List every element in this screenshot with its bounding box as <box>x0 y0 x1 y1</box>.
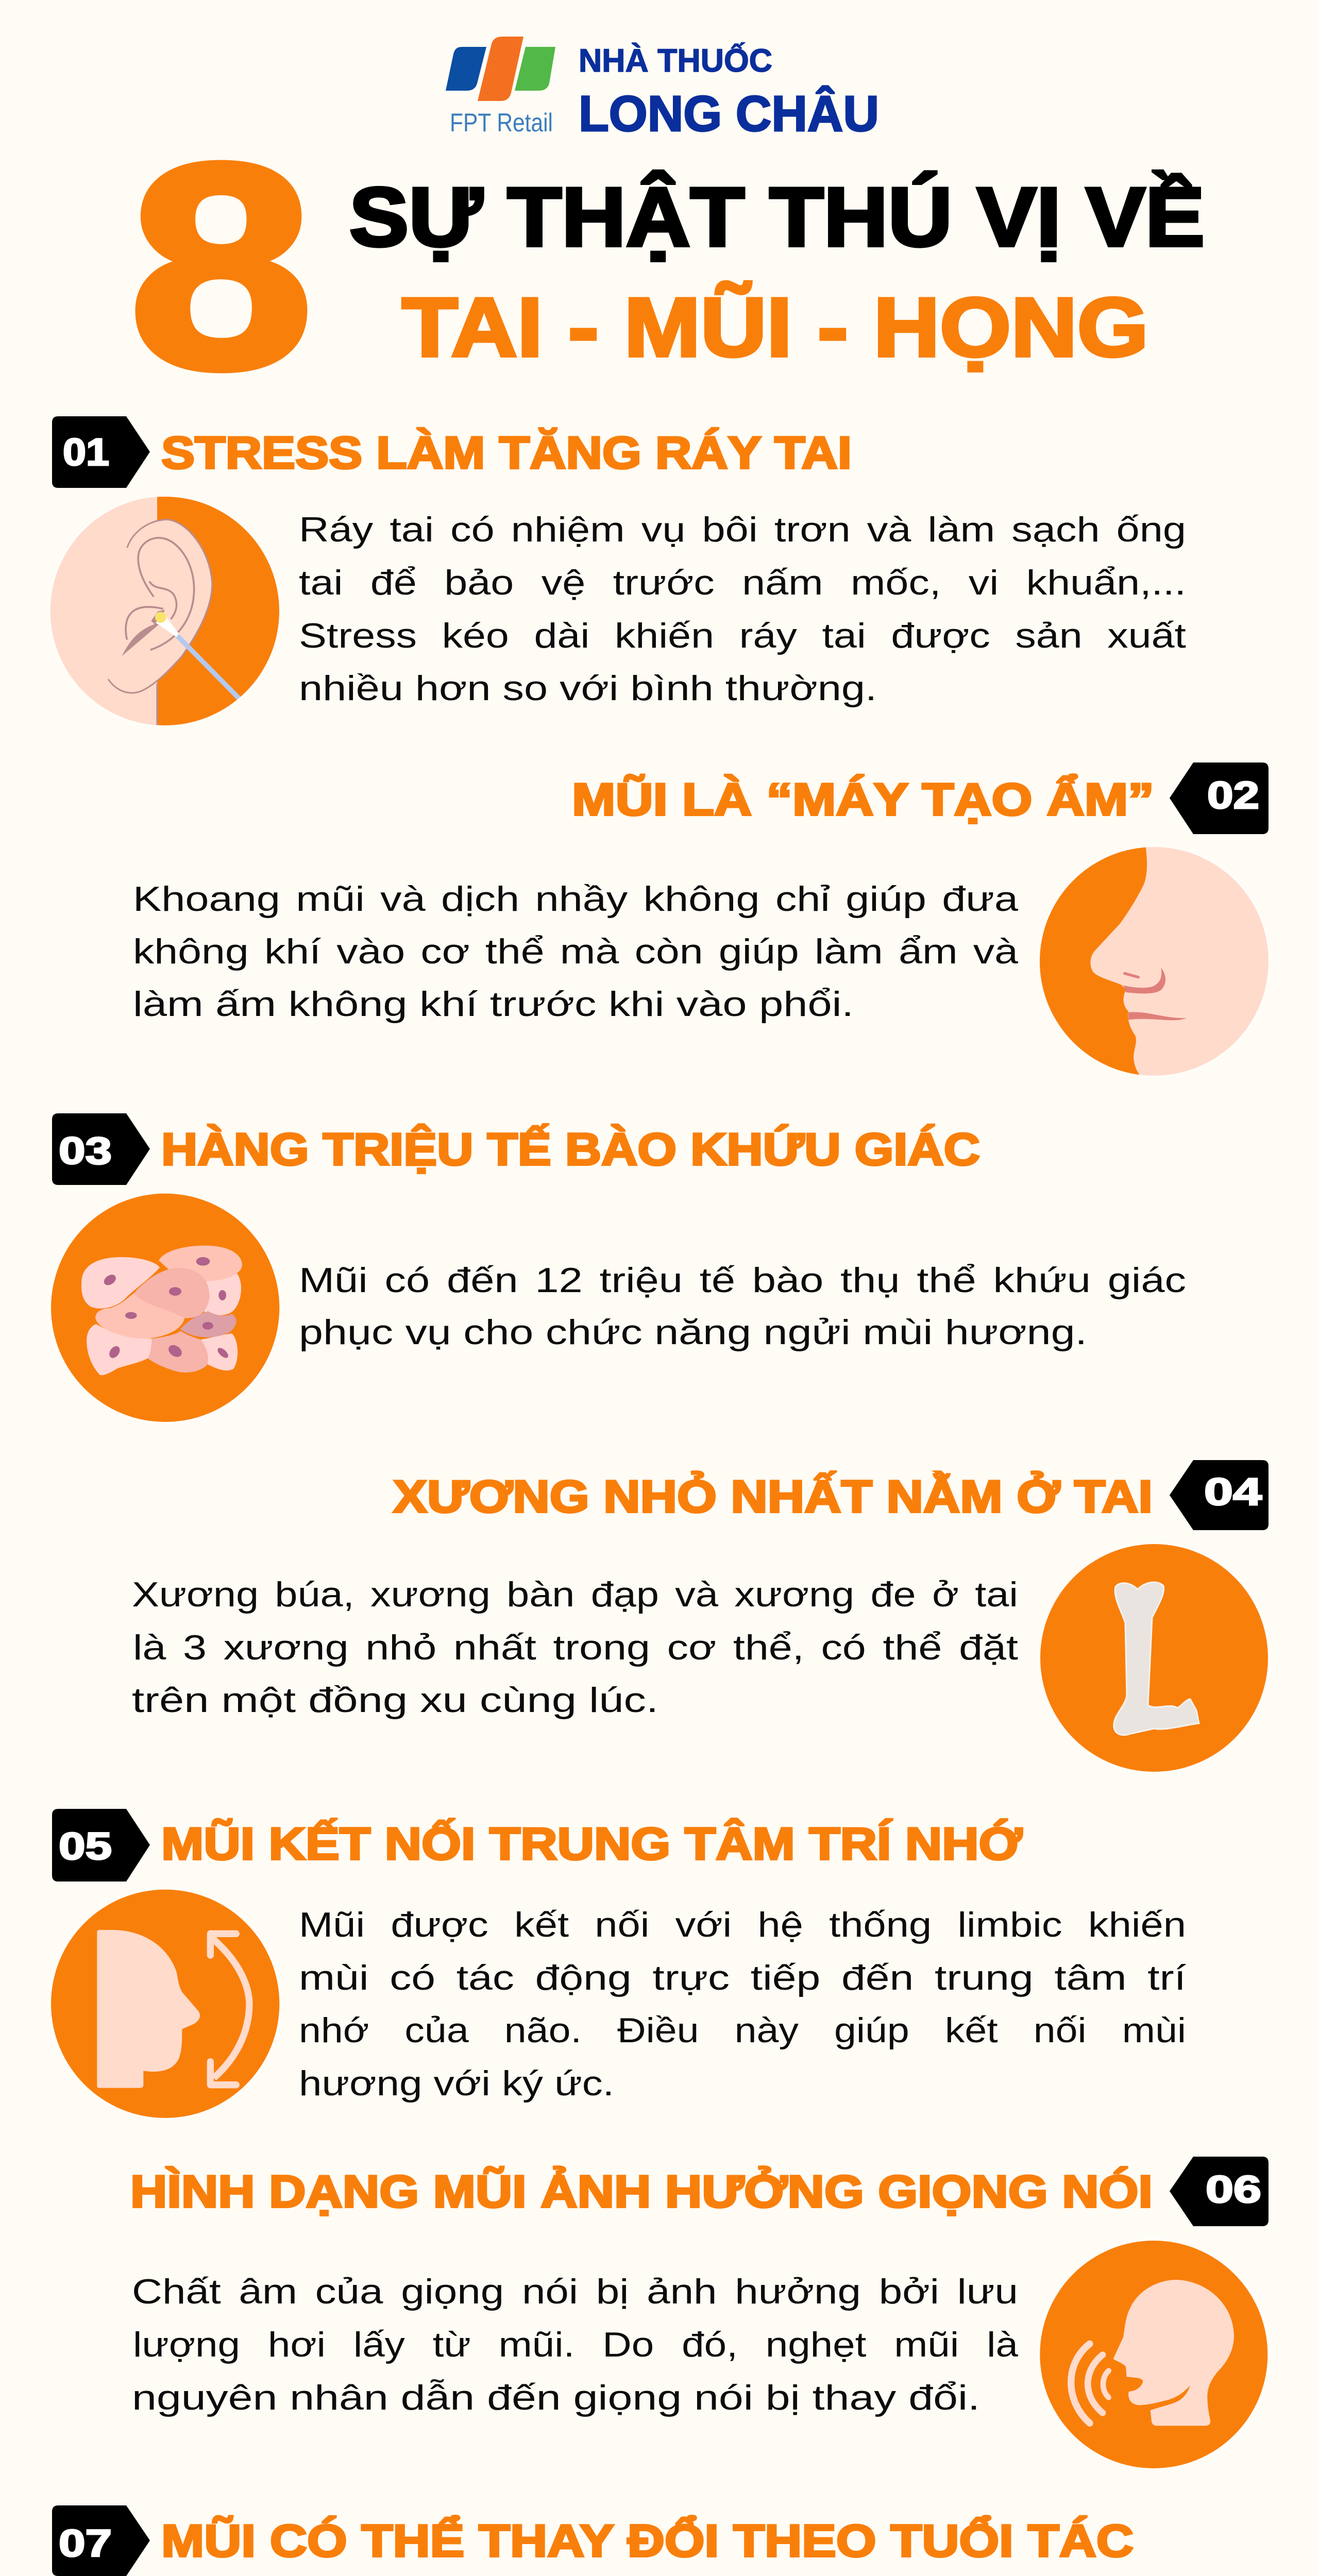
badge 07 <box>52 2505 150 2576</box>
text block 06: nguyên nhân dẫn đến giọng nói bị thay đổi. <box>132 2378 980 2417</box>
text block 01: nhiều hơn so với bình thường. <box>299 669 877 708</box>
badge 02 <box>1170 762 1269 834</box>
text block 05: hương với ký ức. <box>299 2064 614 2103</box>
text block 03 <box>299 1261 1186 1352</box>
icon: nose profile <box>1025 844 1271 1078</box>
text block 02: không khí vào cơ thể mà còn giúp làm ẩm và <box>133 932 1018 971</box>
badge 07: 07 <box>59 2522 112 2565</box>
text block 02 <box>133 879 1018 1024</box>
panel: fact 02 <box>133 762 1271 1078</box>
text block 01: Stress kéo dài khiến ráy tai được sản xuất <box>299 616 1186 655</box>
panel: fact 04 <box>132 1460 1271 1774</box>
text block 03: Mũi có đến 12 triệu tế bào thụ thể khứu giác <box>299 1261 1186 1300</box>
text block 01 <box>299 510 1186 708</box>
logo text: Nhà thuốc: NHÀ THUỐC <box>579 42 772 79</box>
text block 01: tai để bảo vệ trước nấm mốc, vi khuẩn,... <box>299 563 1186 602</box>
text block 06: Chất âm của giọng nói bị ảnh hưởng bởi lưu <box>132 2272 1018 2311</box>
badge 05: 05 <box>59 1825 112 1868</box>
badge 06: 06 <box>1206 2168 1261 2211</box>
badge 04 <box>1170 1460 1269 1530</box>
title <box>129 104 1205 429</box>
icon: FPT three-colour stripes <box>446 37 555 101</box>
badge 04: 04 <box>1204 1470 1262 1513</box>
heading 03: HÀNG TRIỆU TẾ BÀO KHỨU GIÁC <box>161 1124 980 1175</box>
icon: bone <box>1038 1541 1271 1774</box>
icon: head with arrow <box>48 1887 282 2121</box>
text block 05 <box>299 1905 1186 2103</box>
heading 07: MŨI CÓ THỂ THAY ĐỔI THEO TUỔI TÁC <box>161 2515 1134 2566</box>
icon: ear with cotton swab <box>50 497 279 725</box>
text block 05: nhớ của não. Điều này giúp kết nối mùi <box>299 2011 1186 2050</box>
text block 06 <box>132 2272 1018 2417</box>
panel: fact 03 <box>48 1113 1186 1425</box>
text block 04 <box>132 1575 1018 1720</box>
text block 04: trên một đồng xu cùng lúc. <box>132 1681 658 1720</box>
big number 8: 8 <box>129 104 313 429</box>
badge 06 <box>1170 2157 1269 2226</box>
text block 06: lượng hơi lấy từ mũi. Do đó, nghẹt mũi là <box>133 2325 1018 2364</box>
badge 05 <box>52 1809 150 1882</box>
text block 04: Xương búa, xương bàn đạp và xương đe ở tai <box>132 1575 1018 1614</box>
title line 1: SỰ THẬT THÚ VỊ VỀ <box>349 171 1205 264</box>
panel: fact 05 <box>48 1809 1186 2121</box>
text block 02: làm ấm không khí trước khi vào phổi. <box>133 985 854 1024</box>
text block 02: Khoang mũi và dịch nhầy không chỉ giúp đưa <box>133 879 1018 919</box>
heading 06: HÌNH DẠNG MŨI ẢNH HƯỞNG GIỌNG NÓI <box>130 2166 1153 2217</box>
logo: FPT Retail / Nhà thuốc Long Châu <box>446 37 879 142</box>
badge 01 <box>52 416 150 488</box>
badge 03 <box>52 1113 150 1185</box>
heading 02: MŨI LÀ “MÁY TẠO ẨM” <box>572 774 1154 825</box>
text block 04: là 3 xương nhỏ nhất trong cơ thể, có thể đặt <box>133 1628 1018 1667</box>
panel: fact 06 <box>130 2157 1271 2471</box>
heading 01: STRESS LÀM TĂNG RÁY TAI <box>161 427 852 478</box>
badge 03: 03 <box>59 1129 112 1172</box>
title line 2: TAI - MŨI - HỌNG <box>402 281 1148 374</box>
heading 04: XƯƠNG NHỎ NHẤT NẰM Ở TAI <box>393 1471 1153 1522</box>
heading 05: MŨI KẾT NỐI TRUNG TÂM TRÍ NHỚ <box>161 1818 1022 1869</box>
logo text: FPT Retail: FPT Retail <box>450 108 553 137</box>
icon: olfactory cells <box>48 1191 282 1425</box>
text block 05: Mũi được kết nối với hệ thống limbic khiến <box>299 1905 1186 1944</box>
panel: fact 01 <box>31 416 1186 737</box>
text block 01: Ráy tai có nhiệm vụ bôi trơn và làm sạch ống <box>299 510 1186 549</box>
icon: speaking head <box>1037 2238 1271 2471</box>
logo text: Long Châu: LONG CHÂU <box>579 86 879 142</box>
text block 03: phục vụ cho chức năng ngửi mùi hương. <box>299 1313 1087 1352</box>
badge 01: 01 <box>63 431 109 473</box>
badge 02: 02 <box>1207 774 1259 817</box>
text block 05: mùi có tác động trực tiếp đến trung tâm trí <box>299 1958 1186 1997</box>
panel: fact 07 <box>48 2505 1185 2576</box>
